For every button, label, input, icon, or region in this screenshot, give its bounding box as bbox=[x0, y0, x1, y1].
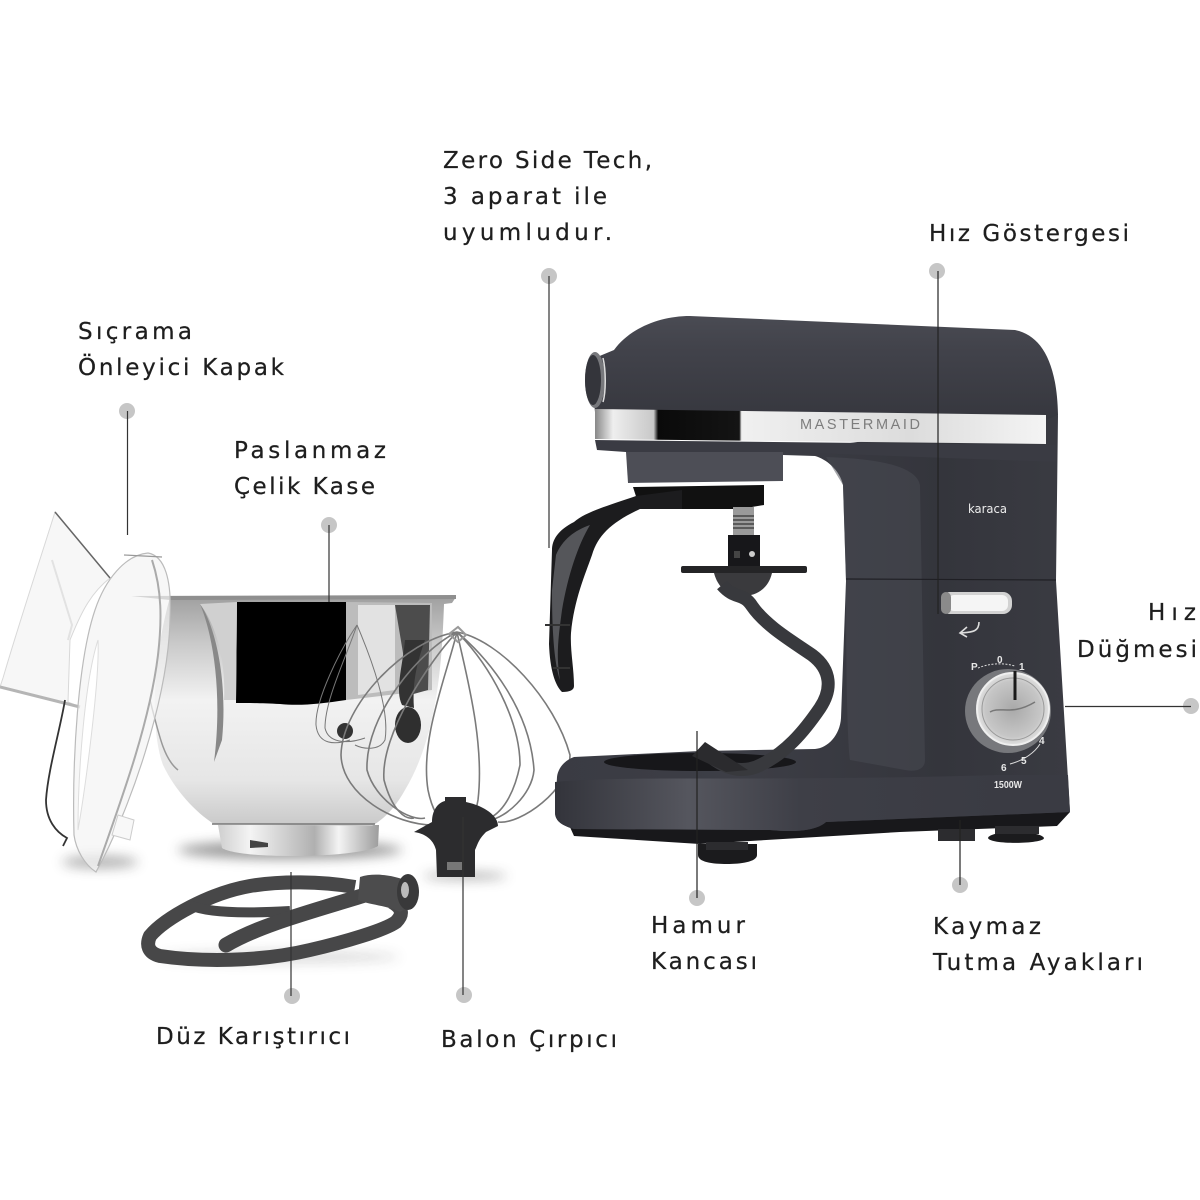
reflected whisk bbox=[316, 625, 386, 748]
base lower band bbox=[555, 775, 1070, 831]
soft floor shadows bbox=[62, 841, 507, 963]
callout: Zero Side Tech bbox=[443, 148, 652, 548]
callout: Zero Side Tech: uyumludur. bbox=[443, 220, 612, 246]
speed display bbox=[585, 352, 605, 408]
dial scale marks: 0 bbox=[997, 655, 1003, 666]
callout: Düz Karıştırıcı bbox=[156, 872, 350, 1050]
callout: Hamur Kancası: Kancası bbox=[651, 949, 757, 975]
handle ticks bbox=[545, 625, 570, 668]
icon: splash guard chute bbox=[0, 512, 110, 846]
wattage label: 1500W bbox=[994, 779, 1022, 791]
callout: Sıçrama Önleyici Kapak: Önleyici Kapak bbox=[78, 353, 285, 381]
mixer body column and base bbox=[555, 415, 1070, 831]
callout: Paslanmaz Çelik Kase bbox=[234, 438, 386, 602]
dough hook bbox=[692, 585, 828, 772]
callout: Sıçrama Önleyici Kapak bbox=[78, 319, 285, 535]
splash guard handle bbox=[549, 490, 682, 692]
callout: Düz Karıştırıcı: Düz Karıştırıcı bbox=[156, 1024, 350, 1050]
brand: Mastermaid: MASTERMAID bbox=[800, 417, 920, 433]
callout: Hız Göstergesi bbox=[929, 221, 1129, 614]
dial scale marks: 4 bbox=[1039, 736, 1045, 747]
callout: Hız Düğmesi bbox=[1065, 600, 1199, 714]
dial scale marks: 5 bbox=[1021, 756, 1027, 767]
callout: Balon Çırpıcı bbox=[441, 817, 617, 1053]
inner arch panel bbox=[826, 457, 925, 771]
black reflection bbox=[236, 602, 346, 705]
callout: Kaymaz Tutma Ayakları: Kaymaz bbox=[933, 914, 1041, 940]
callout: Zero Side Tech: 3 aparat ile bbox=[443, 184, 607, 210]
icon: splash guard lid bbox=[74, 553, 170, 872]
callout: Hız Düğmesi: Hız bbox=[1148, 600, 1196, 626]
icon: flat beater bbox=[148, 874, 419, 960]
dial scale marks: 1 bbox=[1019, 662, 1025, 673]
under-band ledge bbox=[595, 440, 1056, 462]
panel: product photo of accessories bbox=[0, 512, 570, 963]
callout: Kaymaz Tutma Ayakları bbox=[932, 820, 1143, 976]
spindle bbox=[728, 507, 760, 566]
seam line bbox=[846, 579, 1056, 580]
panel: stand mixer bbox=[545, 316, 1070, 864]
stainless steel bowl bbox=[131, 595, 456, 826]
callout: Hamur Kancası: Hamur bbox=[651, 913, 746, 939]
callout: Sıçrama Önleyici Kapak: Sıçrama bbox=[78, 319, 192, 345]
black hub bbox=[633, 485, 764, 509]
handle highlight bbox=[552, 525, 590, 680]
chrome band bbox=[595, 409, 1046, 444]
callout: Hız Düğmesi: Düğmesi bbox=[1077, 637, 1197, 663]
callout: Paslanmaz Çelik Kase: Paslanmaz bbox=[234, 438, 386, 464]
tilt lever button bbox=[941, 592, 1012, 614]
dial scale marks: 6 bbox=[1001, 763, 1007, 774]
mixer head bbox=[590, 316, 1058, 420]
callout: Paslanmaz Çelik Kase: Çelik Kase bbox=[234, 474, 375, 500]
callout: Hız Göstergesi: Hız Göstergesi bbox=[929, 221, 1129, 247]
dial scale marks: P bbox=[971, 662, 978, 673]
callout: Balon Çırpıcı: Balon Çırpıcı bbox=[441, 1027, 617, 1053]
bowl seat recess bbox=[604, 753, 796, 771]
callout: Hamur Kancası bbox=[651, 731, 757, 975]
hook flange bbox=[681, 566, 807, 596]
dial scale marks bbox=[971, 655, 1045, 774]
callout: Kaymaz Tutma Ayakları: Tutma Ayakları bbox=[932, 950, 1143, 976]
bowl clasp bbox=[250, 840, 268, 848]
mixer underside and feet bbox=[560, 805, 1070, 864]
planetary housing bbox=[626, 452, 783, 483]
callout: Zero Side Tech: Zero Side Tech, bbox=[443, 148, 652, 174]
icon: balloon whisk bbox=[341, 627, 570, 877]
icon: lever arrow bbox=[960, 622, 979, 637]
speed dial bbox=[965, 669, 1051, 753]
bowl stand ring bbox=[218, 825, 379, 856]
karaca logo: karaca bbox=[968, 502, 1007, 516]
